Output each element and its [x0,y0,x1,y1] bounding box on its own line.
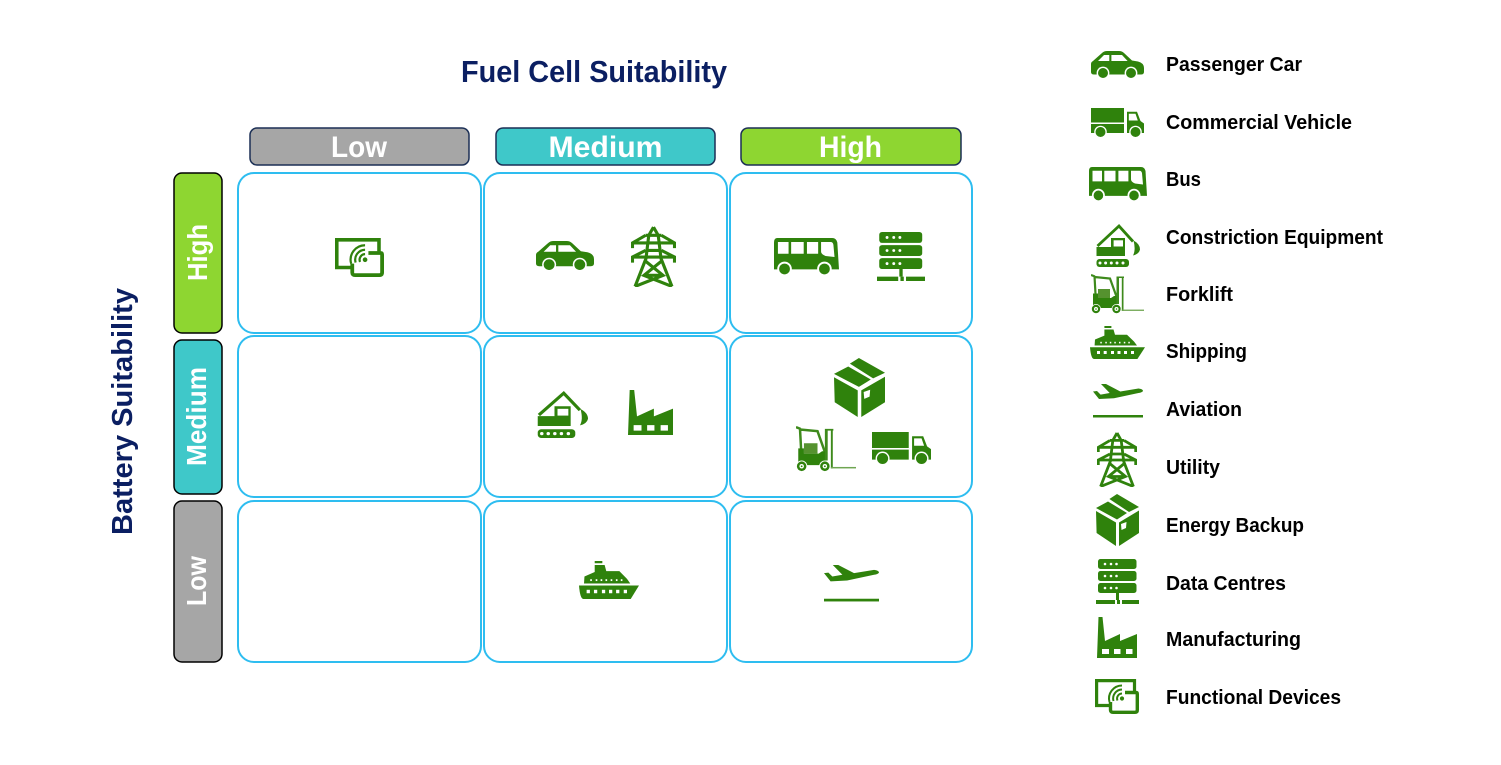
legend item: energy backup [1096,494,1304,546]
legend item: utility: Utility [1166,457,1221,479]
column header: low [250,128,469,165]
icon: commercial vehicle [872,432,931,465]
icon: forklift [796,427,856,472]
legend item: utility [1098,433,1221,486]
icon: shipping [579,561,639,599]
cell: low battery, low fuel cell [238,501,481,662]
row header: low [174,501,222,662]
cell: low battery, high fuel cell [730,501,972,662]
cell: high battery, high fuel cell [730,173,972,333]
legend item: shipping [1090,326,1247,363]
legend [1089,51,1383,712]
legend item: manufacturing: Manufacturing [1166,629,1301,651]
legend item: manufacturing [1097,617,1301,658]
y-axis title: Battery Suitability [107,288,139,535]
legend item: forklift: Forklift [1166,284,1233,306]
row header: medium [174,340,222,494]
legend item: energy backup: Energy Backup [1166,515,1304,537]
icon: functional devices [337,240,382,275]
column header: medium [496,128,715,165]
legend item: shipping: Shipping [1166,341,1247,363]
cell: medium battery, medium fuel cell [484,336,727,497]
legend item: commercial vehicle [1091,108,1352,138]
row header: low: Low [181,556,212,606]
icon: energy backup [834,358,885,417]
legend item: construction equipment: Constriction Equipment [1166,227,1383,249]
legend item: construction equipment [1096,226,1383,267]
icon: aviation [824,565,879,601]
icon: data centres [877,232,925,281]
legend item: data centres: Data Centres [1166,573,1286,595]
column header: high [741,128,961,165]
legend item: functional devices [1097,681,1341,712]
cell: medium battery, high fuel cell [730,336,972,497]
cell: medium battery, low fuel cell [238,336,481,497]
legend item: bus [1089,167,1201,202]
row header: medium: Medium [181,367,212,466]
cell: high battery, low fuel cell [238,173,481,333]
title: Fuel Cell Suitability [461,54,728,89]
icon: construction equipment [538,393,588,438]
row header: high [174,173,222,333]
cell: high battery, medium fuel cell [484,173,727,333]
icon: passenger car [536,241,594,272]
icon: manufacturing [628,390,673,435]
column header: medium: Medium [548,131,662,164]
legend item: bus: Bus [1166,169,1201,191]
legend item: aviation: Aviation [1166,399,1242,421]
column header: low: Low [331,131,388,164]
legend item: passenger car [1091,51,1302,79]
icon: utility [632,227,675,286]
legend item: data centres [1096,559,1286,604]
row header: high: High [182,224,213,281]
legend item: commercial vehicle: Commercial Vehicle [1166,112,1352,134]
column header: high: High [819,131,882,164]
cell: low battery, medium fuel cell [484,501,727,662]
legend item: functional devices: Functional Devices [1166,687,1341,709]
legend item: aviation [1093,384,1242,421]
legend item: forklift [1091,275,1233,314]
legend item: passenger car: Passenger Car [1166,54,1302,76]
icon: bus [774,238,839,276]
